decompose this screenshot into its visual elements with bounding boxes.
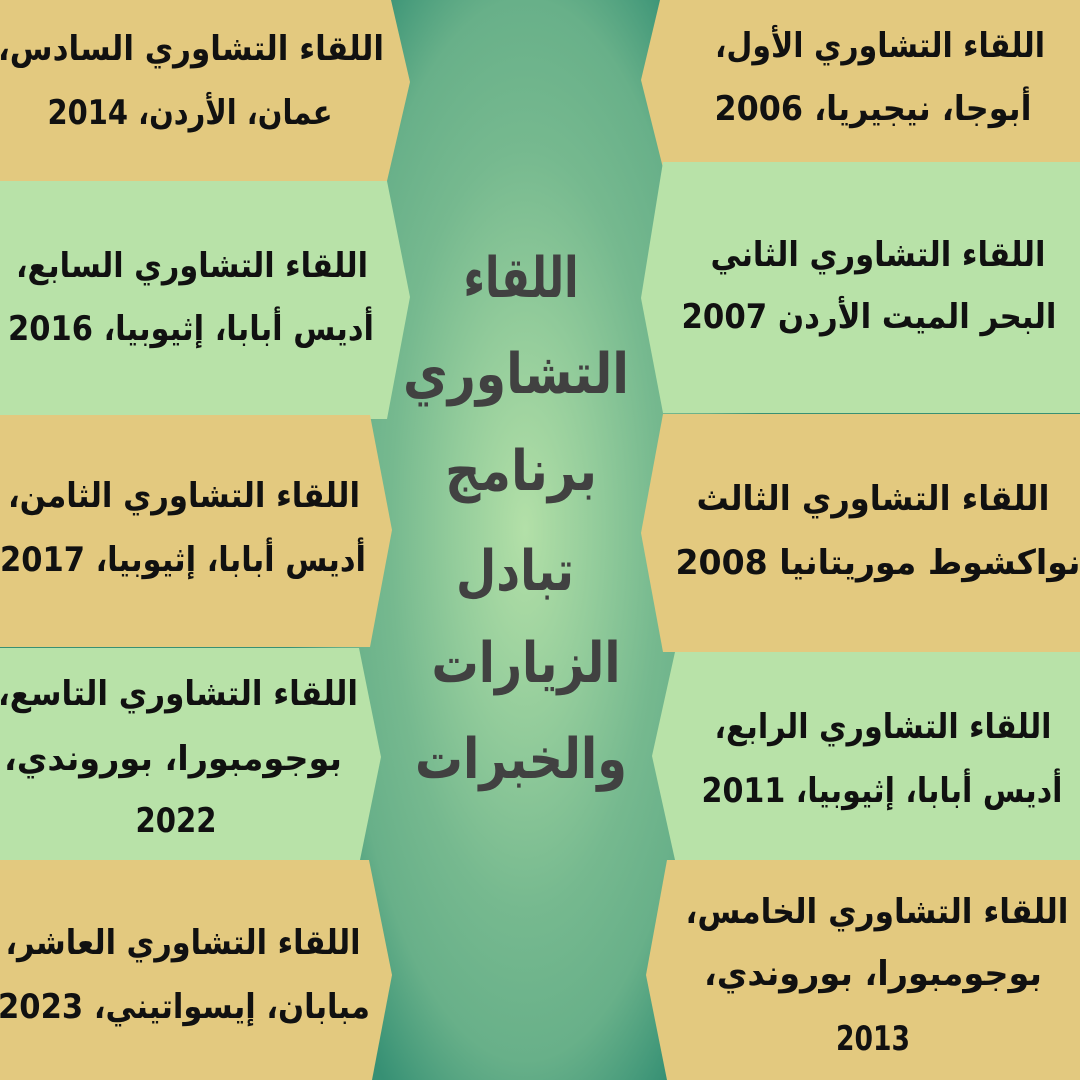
- panel: meeting 1: [641, 0, 1080, 168]
- central title: تبادل: [456, 539, 574, 604]
- central title: برنامج: [445, 439, 597, 504]
- panel: meeting 9: 2022: [136, 801, 216, 841]
- panel: meeting 8: أديس أبابا، إثيوبيا، 2017: [0, 537, 366, 580]
- panel: meeting 2: اللقاء التشاوري الثاني: [710, 235, 1046, 275]
- panel: meeting 6: عمان، الأردن، 2014: [48, 91, 333, 133]
- panel: meeting 9: [0, 648, 381, 860]
- panel: meeting 6: اللقاء التشاوري السادس،: [0, 29, 384, 69]
- panel: meeting 3: [641, 414, 1080, 652]
- panel: meeting 2: البحر الميت الأردن 2007: [682, 295, 1056, 337]
- central title: والخبرات: [415, 727, 627, 792]
- panel: meeting 9: بوجومبورا، بوروندي،: [4, 739, 342, 779]
- panel: meeting 4: [652, 652, 1080, 860]
- panel: meeting 8: اللقاء التشاوري الثامن،: [8, 476, 360, 516]
- panel: meeting 5: بوجومبورا، بوروندي،: [704, 954, 1042, 994]
- panel: meeting 9: اللقاء التشاوري التاسع،: [0, 674, 358, 714]
- central title: الزيارات: [432, 631, 620, 696]
- panel: meeting 3: اللقاء التشاوري الثالث: [696, 479, 1050, 519]
- central title: اللقاء: [464, 246, 578, 311]
- panel: meeting 10: [0, 860, 392, 1080]
- central title: التشاوري: [403, 342, 629, 407]
- panel: meeting 1: أبوجا، نيجيريا، 2006: [714, 86, 1032, 129]
- panel: meeting 8: [0, 415, 392, 647]
- panel: meeting 7: أديس أبابا، إثيوبيا، 2016: [8, 306, 374, 349]
- panel: meeting 3: نواكشوط موريتانيا 2008: [675, 543, 1080, 583]
- panel: meeting 7: اللقاء التشاوري السابع،: [16, 246, 368, 286]
- panel: meeting 1: اللقاء التشاوري الأول،: [715, 24, 1045, 66]
- central title: [403, 246, 629, 792]
- panel: meeting 10: اللقاء التشاوري العاشر،: [6, 923, 360, 963]
- panel: meeting 5: [646, 860, 1080, 1080]
- panel: meeting 2: [641, 162, 1080, 413]
- panel: meeting 10: مبابان، إيسواتيني، 2023: [0, 987, 370, 1027]
- panel: meeting 7: [0, 181, 410, 419]
- panel: meeting 6: [0, 0, 410, 181]
- panel: meeting 5: 2013: [836, 1019, 910, 1059]
